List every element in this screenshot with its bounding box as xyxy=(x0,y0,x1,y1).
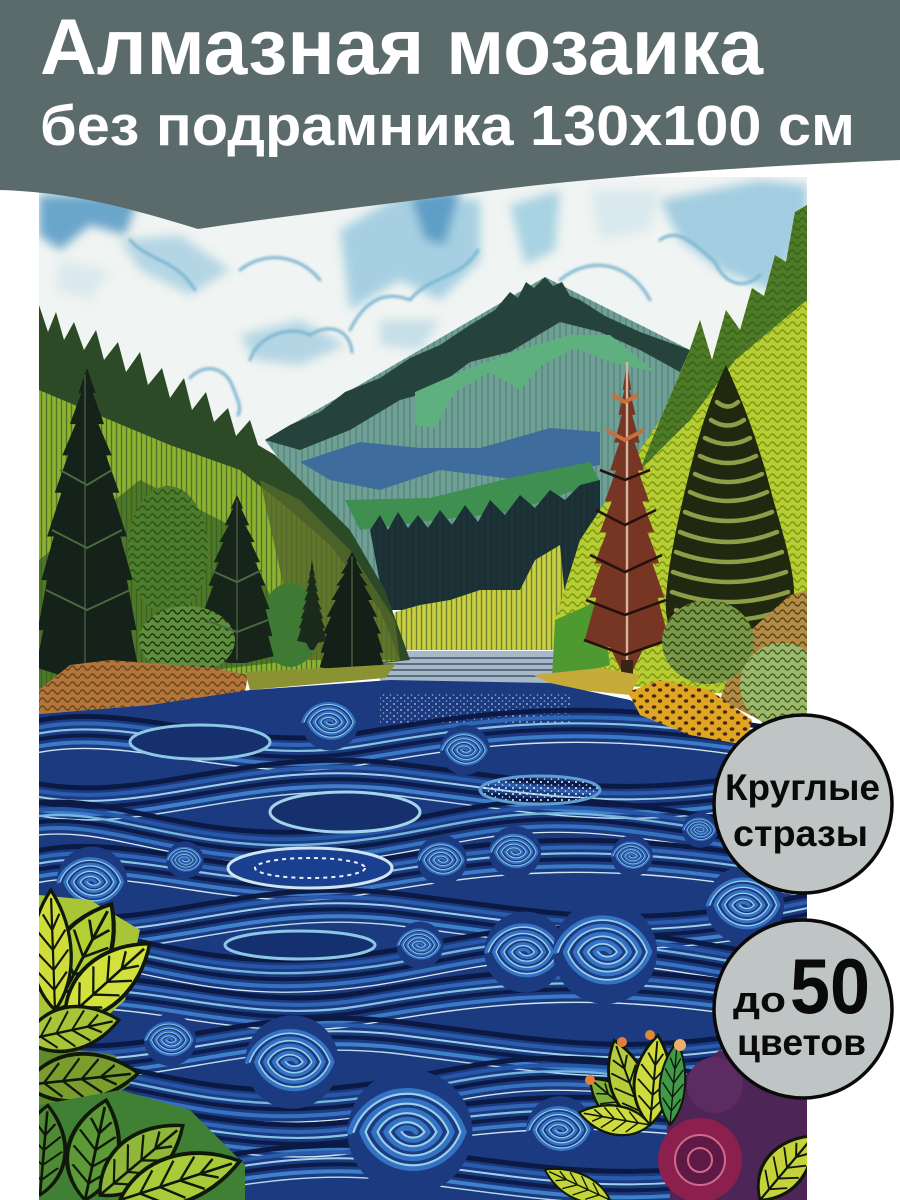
big olive conifer xyxy=(666,365,794,638)
dotted foam near far shore xyxy=(380,694,570,724)
badge: up to 50 colours: 50 xyxy=(790,942,870,1030)
wave bands xyxy=(20,710,830,1200)
left shore xyxy=(39,660,396,714)
badge: up to 50 colours: до xyxy=(733,979,786,1020)
badge: round rhinestones xyxy=(714,715,892,893)
right forest slope xyxy=(552,205,807,700)
spirals xyxy=(57,693,784,1194)
bottom-right flowers xyxy=(539,1030,828,1200)
left dark conifers and bushes xyxy=(36,368,384,680)
distant mountain xyxy=(265,277,690,610)
header banner xyxy=(0,0,900,229)
red pine tree xyxy=(584,362,670,690)
yellow tree line at far shore xyxy=(385,545,570,650)
subtitle: без подрамника 130х100 см xyxy=(40,94,855,158)
badge: round rhinestones: Круглые xyxy=(725,767,880,808)
title: Алмазная мозаика xyxy=(40,2,764,91)
badge: up to 50 colours xyxy=(714,920,892,1098)
badge: round rhinestones: стразы xyxy=(733,813,868,854)
badge: up to 50 colours: цветов xyxy=(737,1022,866,1063)
artwork: forest river painting xyxy=(15,177,830,1200)
elongated eddies xyxy=(130,725,600,959)
bottom-left foliage xyxy=(39,887,245,1200)
distant lake xyxy=(380,651,560,685)
sky and clouds xyxy=(39,177,807,477)
left forest slope xyxy=(39,305,410,700)
yellow speckled bush at water edge xyxy=(628,680,752,745)
right shore bushes xyxy=(533,590,824,727)
river with swirling waves xyxy=(20,680,830,1200)
